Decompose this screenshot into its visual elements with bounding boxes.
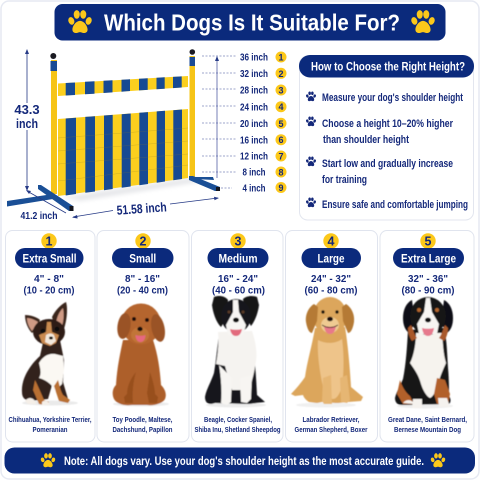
height row 16 inch: 6 — [278, 135, 284, 145]
dimension: width 51.58 inch: 51.58 inch — [116, 199, 167, 218]
height scale — [202, 52, 286, 194]
height range: 8" - 16" — [125, 273, 160, 285]
photo: bernese mountain dog — [395, 297, 453, 408]
breeds: Labrador Retriever, — [302, 415, 360, 424]
badge 2 — [135, 233, 151, 249]
icon: left title paw — [67, 10, 93, 33]
height row 20 inch: 5 — [278, 119, 284, 129]
right foot — [189, 176, 220, 191]
breeds: German Shepherd, Boxer — [294, 425, 368, 434]
height row 16 inch — [240, 134, 286, 146]
height row 36 inch: 36 inch — [240, 52, 268, 64]
breeds: Chihuahua, Yorkshire Terrier, — [8, 415, 92, 424]
photo: toy poodle — [113, 304, 169, 406]
tip: choose height: than shoulder height — [323, 134, 409, 146]
height row 24 inch — [240, 101, 286, 114]
height range: 24" - 32" — [311, 273, 351, 285]
icon: left note paw — [40, 453, 56, 467]
card: large — [286, 230, 378, 442]
card: extra small — [6, 230, 95, 442]
size label — [112, 248, 174, 268]
height row 28 inch: 28 inch — [240, 86, 268, 96]
breeds: Dachshund, Papillon — [112, 425, 172, 434]
height row 12 inch — [240, 150, 286, 162]
height range — [212, 273, 265, 296]
size label — [15, 248, 84, 268]
size label: Extra Large — [401, 252, 456, 266]
height row 8 inch: 8 — [278, 168, 284, 178]
badge 5 — [420, 233, 436, 249]
badge 3 — [230, 233, 246, 249]
tip: start low — [306, 156, 453, 186]
height row 8 inch: 8 inch — [242, 168, 266, 178]
breeds: Bernese Mountain Dog — [394, 425, 461, 434]
badge 2: 2 — [140, 234, 147, 248]
height range: (10 - 20 cm) — [24, 284, 74, 296]
height row 32 inch: 32 inch — [240, 69, 268, 80]
breeds: Pomeranian — [32, 425, 68, 434]
breeds: Great Dane, Saint Bernard, — [388, 415, 467, 424]
icon: right title paw — [410, 10, 436, 33]
photo: border collie — [205, 296, 266, 408]
badge 1 — [41, 233, 57, 249]
badge 4: 4 — [328, 234, 335, 248]
left post — [50, 53, 57, 194]
height row 24 inch: 24 inch — [240, 102, 268, 114]
ground shadow — [62, 178, 205, 201]
top striped bar — [58, 76, 188, 96]
height row 32 inch — [240, 68, 286, 80]
dimension: depth 41.2 inch — [19, 190, 66, 222]
height row 16 inch: 16 inch — [240, 136, 268, 146]
note banner — [4, 448, 475, 474]
height row 36 inch: 1 — [278, 52, 284, 62]
height row 12 inch: 12 inch — [240, 152, 268, 162]
height row 32 inch: 2 — [278, 69, 284, 79]
height range — [402, 273, 454, 296]
title: Which Dogs Is It Suitable For? — [104, 10, 400, 36]
left foot — [7, 185, 74, 211]
panel: how to choose the right height — [299, 55, 474, 220]
dimension: overall height 43.3 inch — [13, 49, 41, 191]
card: medium — [192, 230, 283, 442]
size label — [393, 248, 464, 268]
tip: start low: for training — [322, 174, 367, 186]
badge 3: 3 — [235, 234, 242, 248]
card: small — [97, 230, 189, 442]
height range: (60 - 80 cm) — [304, 284, 358, 296]
height range — [304, 273, 358, 296]
height range: 32" - 36" — [408, 273, 448, 285]
photo: chihuahua — [22, 302, 78, 406]
height range: (20 - 40 cm) — [117, 284, 168, 296]
height range: (40 - 60 cm) — [212, 284, 265, 296]
size label: Small — [129, 252, 156, 266]
right post — [190, 49, 195, 178]
badge 1: 1 — [46, 234, 53, 248]
badge 4 — [323, 233, 339, 249]
card: extra large — [380, 230, 474, 442]
photo: golden retriever — [291, 297, 363, 408]
title banner — [54, 4, 446, 40]
height row 20 inch — [240, 118, 286, 130]
height row 4 inch: 9 — [278, 183, 284, 193]
height range — [24, 273, 74, 296]
height range: 4" - 8" — [34, 273, 64, 285]
height row 20 inch: 20 inch — [240, 119, 268, 130]
height row 36 inch — [240, 52, 286, 64]
dimension: depth 41.2 inch: 41.2 inch — [20, 211, 58, 222]
height row 24 inch: 4 — [278, 102, 284, 112]
height row 4 inch: 4 inch — [242, 184, 266, 194]
breeds: Shiba Inu, Shetland Sheepdog — [194, 425, 280, 434]
panel heading — [299, 55, 474, 78]
height row 28 inch: 3 — [278, 86, 284, 96]
height range: (80 - 90 cm) — [402, 284, 454, 296]
height range — [117, 273, 168, 296]
height row 4 inch — [242, 182, 286, 194]
size label: Large — [318, 252, 345, 266]
badge 5: 5 — [425, 234, 432, 248]
lower striped panel — [58, 109, 188, 196]
dimension: overall height 43.3 inch: 43.3 — [14, 102, 40, 117]
height range: 16" - 24" — [218, 273, 258, 285]
dimension: width 51.58 inch — [72, 197, 219, 218]
size label — [208, 248, 268, 268]
icon: right note paw — [430, 453, 446, 467]
breeds: Toy Poodle, Maltese, — [112, 415, 172, 424]
height row 12 inch: 7 — [278, 152, 284, 162]
dimension: overall height 43.3 inch: inch — [16, 116, 38, 131]
breeds: Beagle, Cocker Spaniel, — [204, 415, 272, 424]
size label: Extra Small — [22, 252, 76, 266]
size label: Medium — [218, 252, 258, 266]
height row 28 inch — [240, 84, 286, 96]
tip: choose height — [306, 116, 454, 146]
size label — [302, 248, 361, 268]
height row 8 inch — [242, 166, 286, 178]
diagram: agility jump hurdle — [7, 49, 220, 211]
